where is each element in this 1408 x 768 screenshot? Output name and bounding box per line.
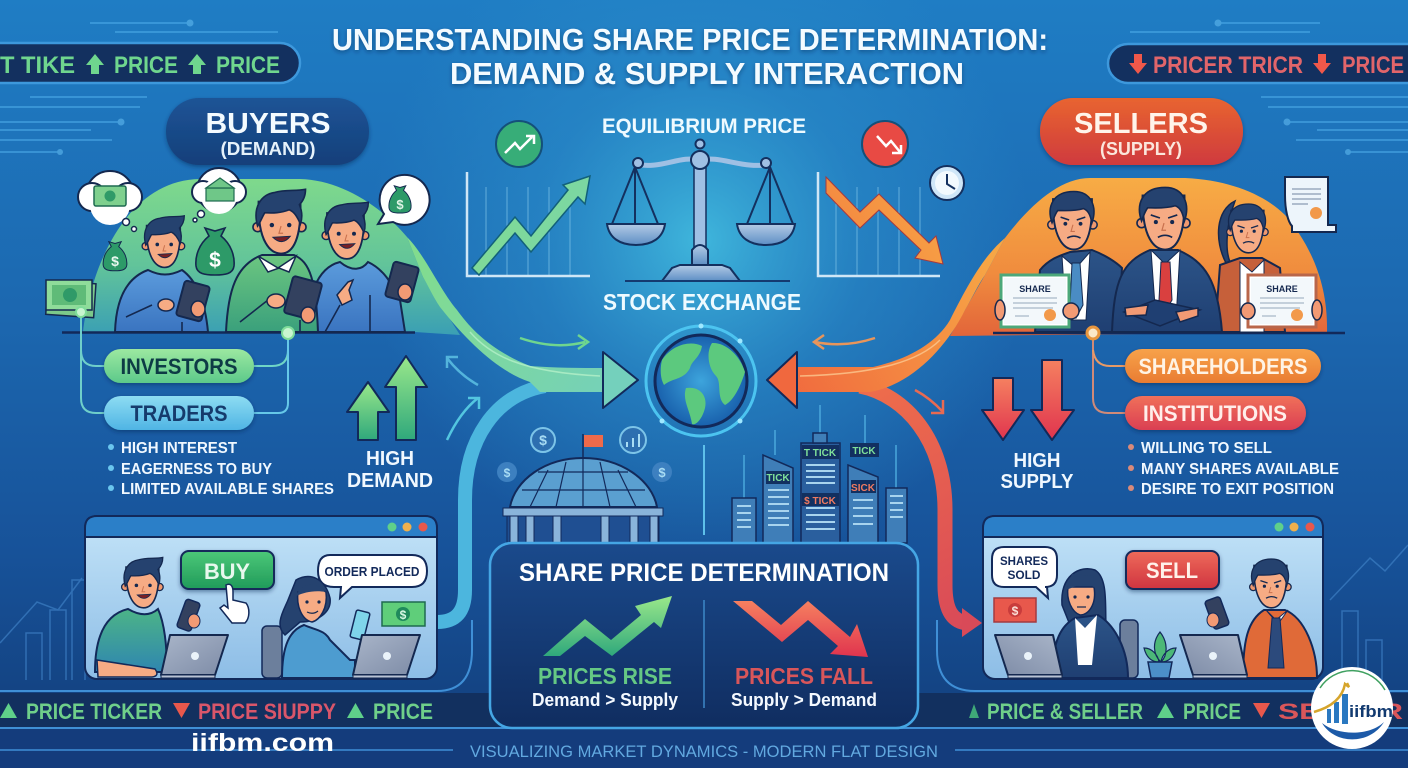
sellers pill: (SUPPLY): [1100, 139, 1182, 159]
ticker signs: T TICK: [804, 448, 837, 459]
buyers bullet list: [108, 440, 334, 498]
buyers bullet list: HIGH INTEREST: [121, 440, 237, 457]
watermark site name: iifbm.com: [191, 729, 334, 757]
footer caption: VISUALIZING MARKET DYNAMICS - MODERN FLAT DESIGN: [470, 742, 938, 761]
ticker left: PRICE SIUPPY: [198, 699, 336, 724]
top ticker right: [1108, 44, 1408, 83]
ticker right: PRICE: [1183, 699, 1241, 724]
label: equilibrium price: EQUILIBRIUM PRICE: [602, 115, 806, 138]
ticker left: PRICE: [373, 699, 433, 724]
pill: institutions: INSTITUTIONS: [1143, 401, 1287, 426]
sellers base line: [993, 332, 1345, 334]
icon: balance scale: [607, 140, 795, 281]
sellers bullet list: WILLING TO SELL: [1141, 440, 1272, 457]
icon: green trend badge: [496, 121, 542, 167]
label: high supply: HIGH: [1014, 450, 1060, 472]
connector: investors and traders: [76, 307, 294, 413]
top ticker left: T TIKE: [0, 52, 75, 79]
banknote green: $: [400, 608, 407, 622]
sellers pill: SELLERS: [1074, 108, 1208, 140]
ticker signs: TICK: [852, 446, 876, 457]
thought cloud: money: [78, 171, 142, 232]
label: stock exchange: STOCK EXCHANGE: [603, 289, 801, 315]
decorative streaks left: [0, 20, 278, 155]
speech bubble: bag: $: [396, 197, 404, 212]
prices fall label: PRICES FALL: [735, 663, 873, 689]
flag: [582, 434, 584, 458]
banknote red: $: [1012, 604, 1019, 618]
seller 3: SHARE: [1266, 284, 1298, 294]
sellers pill: [1040, 98, 1243, 165]
demand over supply: Demand > Supply: [532, 690, 678, 710]
seller 1: [995, 192, 1122, 332]
flow arrow: buyers demand: [407, 237, 638, 408]
icon: high supply arrows: [982, 360, 1074, 440]
small motion arrows: [447, 335, 943, 440]
seller man: [1180, 559, 1317, 678]
faint background charts: [0, 545, 1408, 680]
sellers bullet list: [1128, 440, 1339, 498]
icon: red trend badge: [862, 121, 908, 167]
sell button: SELL: [1146, 558, 1198, 583]
buyers bullet list: LIMITED AVAILABLE SHARES: [121, 481, 334, 498]
ticker right: PRICE & SELLER: [987, 699, 1143, 724]
panel: sellers illustration: [950, 177, 1345, 336]
finance icons: [497, 427, 672, 482]
chart: rising: [467, 172, 590, 276]
shares sold bubble: SOLD: [1008, 568, 1041, 582]
top ticker left: PRICE: [216, 52, 280, 79]
order placed bubble: [318, 555, 427, 598]
sellers bullet list: DESIRE TO EXIT POSITION: [1141, 481, 1334, 498]
speech bubble: bag: [378, 175, 430, 225]
chart: falling: [818, 172, 943, 276]
shares sold bubble: SHARES: [1000, 554, 1048, 568]
potted plant: [1144, 632, 1176, 678]
cash stack: [46, 280, 96, 318]
order placed bubble: ORDER PLACED: [324, 564, 420, 579]
pill: traders: TRADERS: [130, 401, 228, 426]
pill: traders: [104, 396, 254, 430]
buy button: BUY: [204, 559, 250, 584]
pill: shareholders: SHAREHOLDERS: [1138, 354, 1308, 379]
trader man: [95, 557, 228, 678]
pill: investors: INVESTORS: [120, 354, 238, 379]
money bag large: $: [209, 249, 221, 272]
connector: shareholders and institutions: [1087, 327, 1125, 413]
seller 2: [1112, 187, 1222, 332]
ticker signs: TICK: [766, 473, 790, 484]
label: high demand: DEMAND: [347, 470, 433, 492]
sellers backdrop: [950, 178, 1327, 336]
flow arrow: traders branch: [437, 386, 545, 622]
pill: investors: [104, 349, 254, 383]
title: [332, 22, 1048, 91]
shares sold bubble: [992, 547, 1057, 598]
trader woman: [262, 577, 420, 678]
label: high supply: SUPPLY: [1000, 471, 1074, 493]
supply over demand: Supply > Demand: [731, 690, 877, 710]
buyers bullet list: EAGERNESS TO BUY: [121, 461, 272, 478]
money bag small: $: [111, 253, 119, 269]
label: high demand: [347, 448, 433, 492]
icon: exchange building: [497, 427, 672, 543]
flow arrow: sellers supply: [767, 238, 1005, 408]
panel: share price determination: [490, 543, 918, 728]
finance icons: $: [539, 432, 547, 448]
pill: institutions: [1125, 396, 1306, 430]
ticker right: [969, 699, 1403, 724]
ticker left: [0, 699, 433, 724]
buyers pill: (DEMAND): [220, 139, 316, 159]
buyers base line: [62, 331, 415, 334]
buyer 1: [115, 216, 210, 332]
buyers pill: BUYERS: [206, 108, 330, 140]
panel: sell window: [983, 516, 1323, 679]
flow arrow: sellers branch: [860, 386, 982, 637]
panel divider: [703, 600, 705, 708]
top ticker left: [0, 43, 300, 83]
pill: shareholders: [1125, 349, 1321, 383]
label: high supply: [1000, 450, 1074, 493]
banknote red: [994, 598, 1036, 622]
contract scroll: [1285, 177, 1336, 232]
icon: clock: [930, 166, 964, 200]
bottom strip and frames: [0, 620, 1408, 768]
seller 3: [1215, 201, 1322, 332]
title: UNDERSTANDING SHARE PRICE DETERMINATION:: [332, 22, 1048, 57]
seller woman: [995, 569, 1138, 678]
ticker signs: $ TICK: [804, 496, 837, 507]
title: DEMAND & SUPPLY INTERACTION: [450, 56, 964, 91]
colonnade: [503, 508, 663, 543]
icon: high demand arrows: [347, 356, 427, 440]
ticker right: SELLER: [1278, 699, 1403, 724]
buyers pill: [166, 98, 369, 165]
divider above panel: [703, 445, 705, 535]
logo: [1311, 667, 1393, 749]
top ticker right: PRICER TRICR: [1153, 52, 1303, 79]
ticker signs: [766, 443, 879, 507]
panel: buyers illustration: [46, 168, 460, 335]
buy button: [181, 551, 274, 589]
label: high demand: HIGH: [366, 448, 414, 470]
ticker signs: SICK: [851, 483, 876, 494]
finance icons: $: [504, 466, 511, 480]
dome: [510, 458, 657, 507]
sellers bullet list: MANY SHARES AVAILABLE: [1141, 461, 1339, 478]
buyers backdrop: [83, 179, 460, 335]
red falling arrow: [733, 601, 868, 657]
decorative streaks right: [1130, 20, 1408, 155]
green rising arrow: [543, 596, 672, 656]
icon: globe: [646, 324, 756, 436]
sell button: [1126, 551, 1219, 589]
icon: city skyline with tickers: [732, 405, 907, 543]
buyer 2: [226, 189, 322, 332]
hand cursor: [220, 584, 249, 623]
seller 1: SHARE: [1019, 284, 1051, 294]
ticker left: PRICE TICKER: [26, 699, 162, 724]
panel: buy window: [85, 516, 437, 679]
thought cloud: chart: [192, 168, 246, 222]
top ticker left: PRICE: [114, 52, 178, 79]
money bag small: [103, 242, 127, 271]
banknote green: [382, 602, 425, 626]
panel heading: SHARE PRICE DETERMINATION: [519, 559, 889, 587]
finance icons: $: [658, 465, 666, 480]
money bag large: [196, 228, 234, 275]
logo: iifbm: [1349, 702, 1393, 721]
buyer 3: [306, 202, 419, 332]
prices rise label: PRICES RISE: [538, 663, 672, 689]
